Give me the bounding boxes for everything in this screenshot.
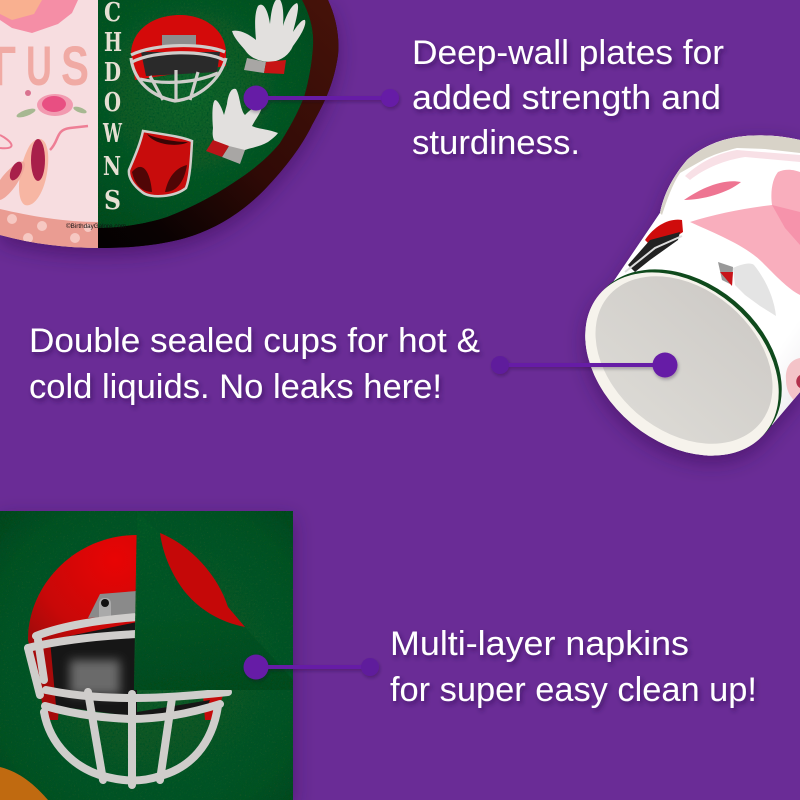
napkin caption: [390, 625, 757, 709]
touchdowns lettering: H: [104, 28, 122, 58]
plate caption: added strength and: [412, 79, 721, 117]
small helmet: [625, 220, 683, 272]
plate body: [0, 0, 347, 250]
TUS lettering: S: [61, 34, 89, 97]
football corner: [0, 767, 48, 800]
copyright text: ©BirthdayGalore.com: [66, 222, 126, 230]
tutu illustration: [0, 0, 78, 33]
plate caption: sturdiness.: [412, 124, 580, 162]
napkin sheet: [0, 511, 293, 800]
helmet visor: [50, 622, 210, 716]
plate caption: Deep-wall plates for: [412, 34, 724, 72]
pink rim band: [685, 150, 800, 180]
touchdowns lettering: N: [103, 152, 121, 182]
touchdowns lettering: D: [104, 58, 121, 88]
plate shadow: [0, 0, 338, 248]
TUS lettering: U: [26, 34, 52, 97]
cup caption: cold liquids. No leaks here!: [29, 368, 442, 406]
small glove: [718, 262, 776, 316]
helmet bracket: [88, 591, 137, 618]
dark wood rim: [97, 0, 347, 250]
cup base: [563, 242, 800, 478]
napkin: [0, 511, 293, 800]
TUS lettering: [0, 46, 88, 86]
pink flower: [16, 90, 87, 119]
ballet shoes: [0, 126, 88, 205]
right shell lobe: [203, 696, 223, 720]
bracket screw: [101, 599, 109, 607]
plate: [0, 0, 347, 250]
cup green band: [552, 232, 800, 490]
plate lower glove: [206, 89, 278, 164]
cup base rim: [549, 235, 800, 493]
connector: cup: [491, 352, 678, 378]
bracket stem: [99, 598, 111, 617]
helmet shell: [28, 535, 137, 720]
cup wall: [614, 135, 800, 425]
folded napkin flap: [134, 516, 254, 686]
small flower: [684, 181, 741, 200]
cup rolled rim: [660, 135, 800, 215]
cup caption: Double sealed cups for hot &: [29, 322, 480, 360]
helmet facemask: [28, 617, 228, 785]
plate shorts: [129, 131, 192, 196]
napkin caption: for super easy clean up!: [390, 671, 757, 709]
touchdowns lettering: S: [104, 186, 121, 216]
salmon patterned border: [0, 209, 98, 250]
pink flower: [786, 358, 800, 405]
visor sheen: [70, 660, 120, 695]
cup: [578, 134, 800, 470]
touchdowns lettering: [102, 0, 123, 216]
red sliver: [160, 533, 245, 627]
tutu shading: [772, 205, 800, 245]
tutu highlight: [0, 0, 42, 20]
touchdowns lettering: O: [104, 88, 121, 118]
plate helmet: [131, 15, 226, 102]
touchdowns lettering: W: [102, 119, 123, 149]
connector: plate: [244, 86, 399, 110]
cup shadow: [549, 135, 800, 493]
flap underside: [134, 534, 293, 690]
plate upper glove: [232, 0, 305, 74]
napkin caption: Multi-layer napkins: [390, 625, 689, 663]
green field: [97, 0, 313, 228]
pink panel: [0, 0, 98, 250]
cup caption: [29, 322, 480, 406]
flower centre: [796, 375, 800, 388]
napkin shadow: [0, 511, 293, 800]
connector: napkin: [244, 654, 379, 680]
tutu: [690, 170, 800, 295]
border crosses: [7, 214, 92, 243]
plate caption: [412, 34, 724, 162]
